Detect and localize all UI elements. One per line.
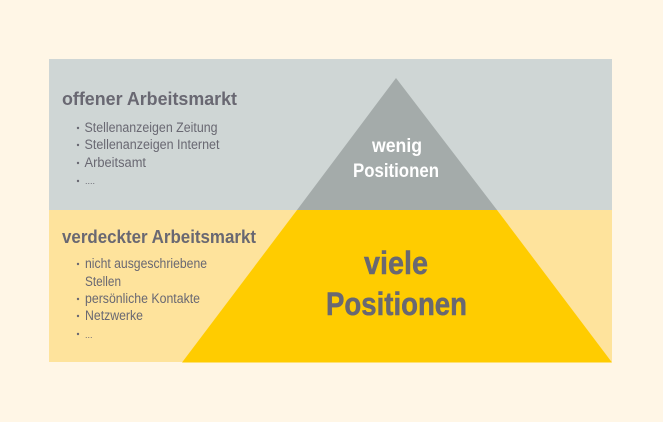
label: viele Positionen [326, 245, 467, 322]
label: wenig Positionen: wenig [371, 136, 422, 157]
label: viele Positionen: viele [364, 245, 428, 281]
list: open labour market channels [77, 120, 220, 186]
list: hidden labour market channels: Stellen [85, 274, 121, 289]
label: viele Positionen: Positionen [326, 286, 467, 322]
list: open labour market channels: Arbeitsamt [84, 155, 146, 170]
heading: verdeckter Arbeitsmarkt: verdeckter Arbeitsmarkt [62, 226, 256, 247]
pyramid top: few positions [297, 78, 497, 210]
heading: offener Arbeitsmarkt: offener Arbeitsmarkt [62, 88, 237, 109]
list: hidden labour market channels: persönliche Kontakte [85, 291, 200, 306]
label: wenig Positionen: Positionen [353, 161, 439, 182]
label: wenig Positionen [353, 136, 439, 182]
list: hidden labour market channels [77, 256, 207, 340]
list: hidden labour market channels: ... [85, 330, 93, 340]
list: hidden labour market channels: Netzwerke [85, 308, 143, 323]
panel: open labour market background [49, 59, 612, 210]
list: open labour market channels: Stellenanzeigen Zeitung [84, 120, 218, 135]
list: hidden labour market channels: nicht ausgeschriebene [85, 256, 207, 271]
list: open labour market channels: Stellenanzeigen Internet [84, 137, 220, 152]
panel: hidden labour market background [49, 210, 612, 362]
list: open labour market channels: .... [85, 176, 95, 186]
pyramid base: many positions [182, 210, 612, 362]
